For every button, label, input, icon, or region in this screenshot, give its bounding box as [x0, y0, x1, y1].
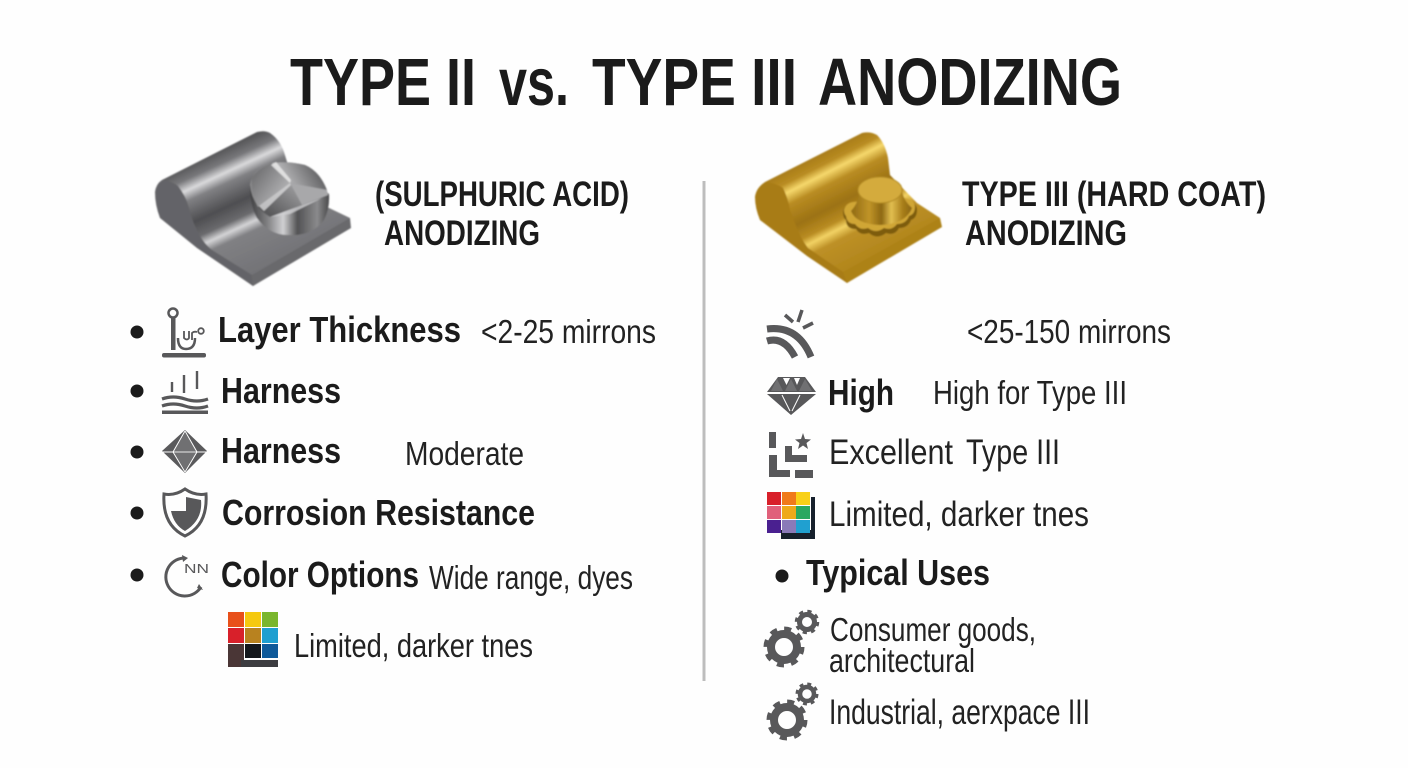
icon: gem	[767, 377, 816, 415]
icon: cycle	[166, 555, 209, 596]
row: limited colors: Limited, darker tnes	[829, 495, 1089, 534]
row: limited colors	[228, 612, 533, 667]
row: layer thickness: Layer Thickness	[218, 309, 461, 350]
row: layer thickness	[130, 308, 656, 358]
heading: type III	[962, 175, 1266, 253]
row: corrosion resistance: Corrosion Resistance	[222, 492, 535, 533]
row: typical uses: Typical Uses	[806, 552, 990, 593]
icon: layer probe	[162, 308, 206, 358]
row: consumer goods: Consumer goods,	[830, 611, 1036, 648]
title: vs.	[499, 45, 569, 120]
icon: gears	[766, 612, 818, 665]
row: excellent: Excellent	[829, 433, 953, 472]
row: color options: Color Options	[221, 554, 419, 595]
row: color options	[130, 554, 633, 596]
row: corrosion resistance	[130, 489, 535, 536]
row: harness 2: Harness	[221, 430, 341, 471]
row: high: High for Type III	[933, 374, 1127, 411]
icon: gears	[769, 684, 817, 738]
row: limited colors: Limited, darker tnes	[294, 627, 533, 664]
row: high	[767, 372, 1127, 415]
row: consumer goods: architectural	[829, 642, 975, 679]
row: industrial	[769, 684, 1090, 738]
heading: type II: ANODIZING	[384, 214, 540, 253]
row: layer thickness: <2-25 mirrons	[481, 313, 656, 350]
heading: type II: (SULPHURIC ACID)	[375, 175, 629, 214]
panel: type II	[130, 131, 656, 667]
icon: diamond	[162, 430, 207, 473]
heading: type III: TYPE III (HARD COAT)	[962, 175, 1266, 214]
title: TYPE III	[592, 45, 797, 120]
panel: type III	[755, 132, 1266, 738]
title	[290, 45, 1122, 120]
row: harness 1	[130, 370, 341, 414]
icon: blocks and star	[769, 432, 813, 478]
icon: shield	[164, 489, 206, 536]
icon: cycle: NN	[184, 561, 209, 576]
row: thickness	[767, 310, 1171, 357]
row: color options: Wide range, dyes	[429, 559, 633, 596]
row: harness 1: Harness	[221, 370, 341, 411]
heading: type II	[375, 175, 629, 253]
row: thickness: <25-150 mirrons	[967, 313, 1171, 350]
row: harness 2	[130, 430, 524, 473]
divider	[702, 181, 706, 681]
heading: type III: ANODIZING	[965, 214, 1127, 253]
icon: colour palette	[767, 492, 815, 539]
row: high: High	[828, 372, 894, 413]
row: excellent	[769, 432, 1060, 478]
icon: waves	[162, 371, 208, 414]
row: consumer goods	[766, 611, 1036, 679]
title: ANODIZING	[818, 45, 1122, 120]
icon: colour palette	[228, 612, 278, 667]
row: excellent: Type III	[966, 433, 1060, 472]
row: industrial: Industrial, aerxpace III	[829, 693, 1090, 732]
row: harness 2: Moderate	[405, 435, 524, 472]
icon: arcs and rays	[767, 310, 813, 357]
row: limited colors	[767, 492, 1089, 539]
icon: gold metal part	[755, 132, 942, 283]
title: TYPE II	[290, 45, 476, 120]
icon: silver metal part	[155, 131, 351, 286]
